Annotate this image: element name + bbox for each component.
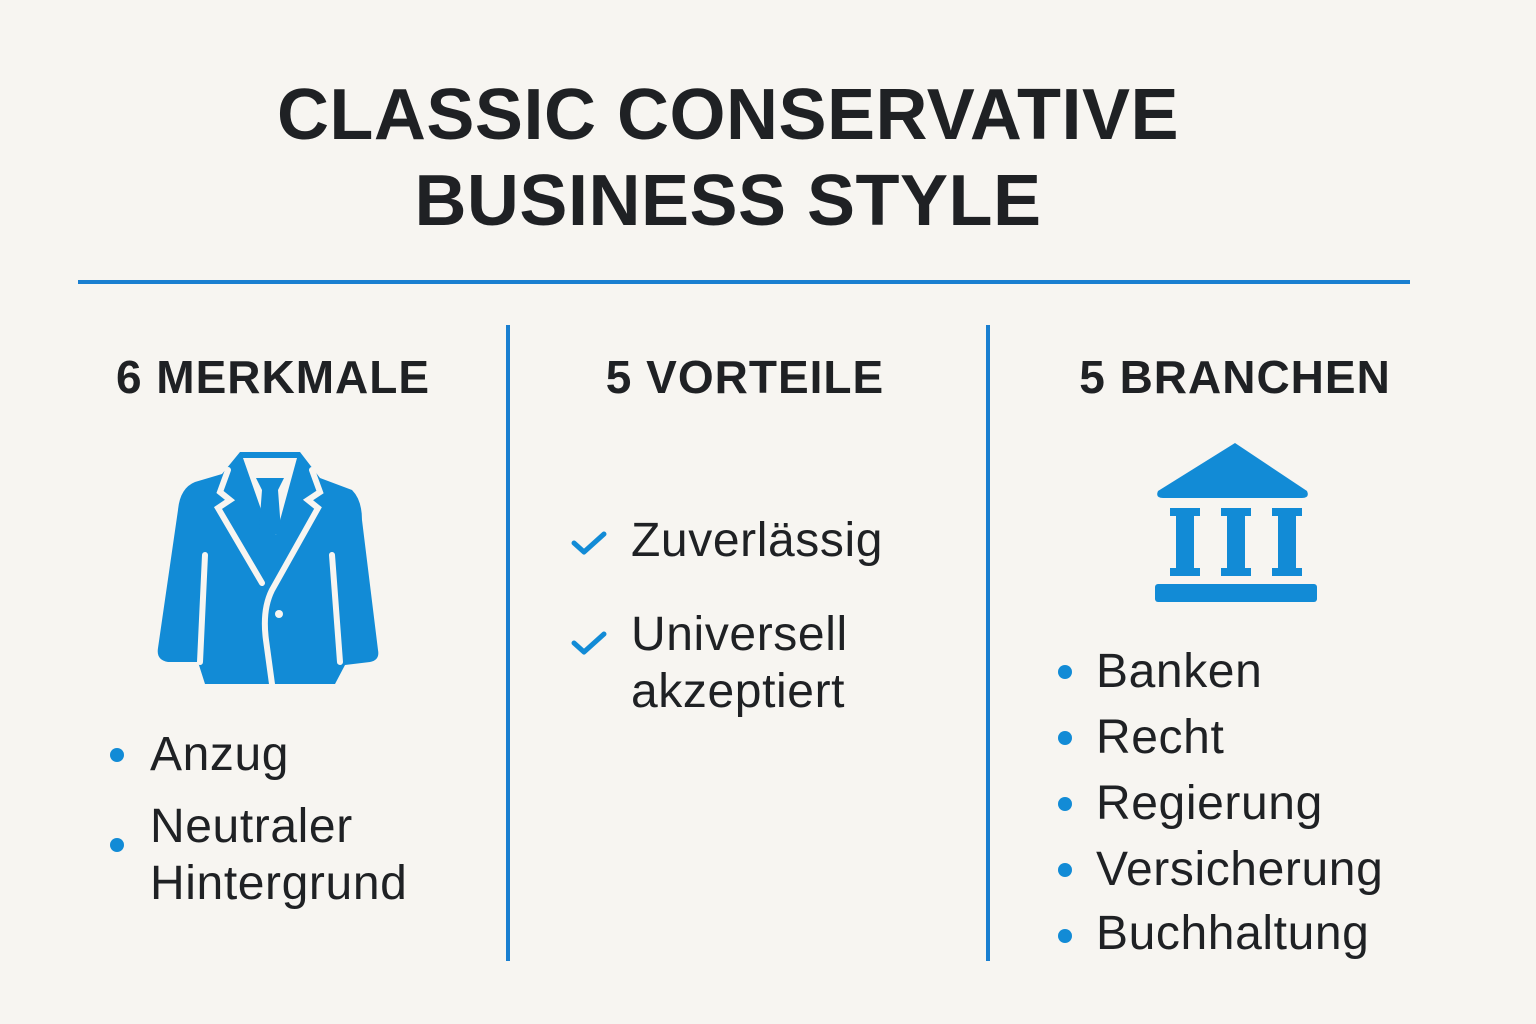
list: vorteile: Zuverlässig xyxy=(631,514,883,567)
list: branchen: Versicherung xyxy=(1096,843,1383,896)
heading: merkmale: 6 MERKMALE xyxy=(116,351,430,403)
heading: branchen: 5 BRANCHEN xyxy=(1079,351,1391,403)
divider line xyxy=(78,280,1410,284)
list: branchen: Buchhaltung xyxy=(1096,907,1369,960)
list: merkmale xyxy=(110,728,407,910)
list: branchen: Banken xyxy=(1096,645,1262,698)
list: vorteile: Universell xyxy=(631,608,848,661)
text: Anzug xyxy=(150,728,289,781)
title: BUSINESS STYLE xyxy=(414,161,1042,241)
heading: vorteile: 5 VORTEILE xyxy=(606,351,884,403)
title xyxy=(277,75,1179,241)
list: vorteile: akzeptiert xyxy=(631,665,845,718)
text: Neutraler xyxy=(150,800,353,853)
column separator 2 xyxy=(986,325,990,961)
icon: bank building xyxy=(1155,443,1317,602)
list: branchen xyxy=(1058,645,1383,960)
text: Hintergrund xyxy=(150,857,407,910)
column separator 1 xyxy=(506,325,510,961)
list: vorteile xyxy=(572,514,883,718)
list: branchen: Regierung xyxy=(1096,777,1323,830)
title: CLASSIC CONSERVATIVE xyxy=(277,75,1179,155)
list: branchen: Recht xyxy=(1096,711,1224,764)
